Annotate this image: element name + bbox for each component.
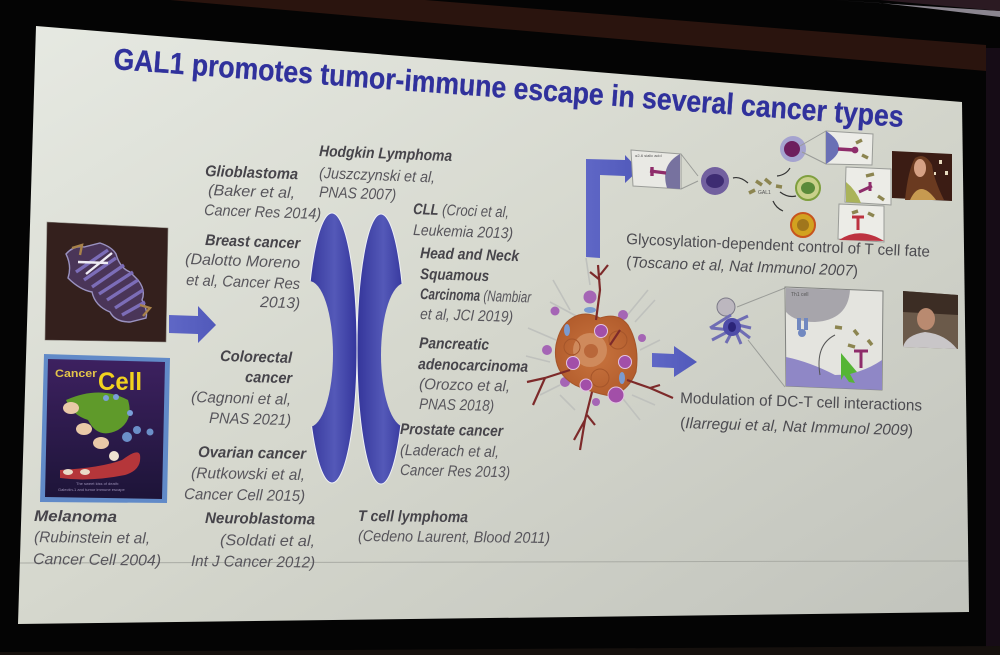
arrow: tumor to DC-T modulation xyxy=(652,346,697,377)
text: T cell lymphoma: (Cedeno Laurent, Blood 2011) xyxy=(358,528,550,547)
text: Breast cancer: et al, Cancer Res xyxy=(186,272,301,293)
icon: left crescent xyxy=(307,213,357,483)
icon: tumor with vessels xyxy=(526,258,673,450)
text: T cell lymphoma xyxy=(358,508,550,547)
text: Hodgkin Lymphoma: PNAS 2007) xyxy=(319,184,396,204)
text: Head and Neck Squamous Carcinoma: Head and Neck xyxy=(420,245,521,265)
title: GAL1 promotes tumor-immune escape in several cancer types xyxy=(112,43,905,134)
text: Ovarian cancer xyxy=(184,444,307,505)
text: Head and Neck Squamous Carcinoma xyxy=(420,245,532,326)
arrow: tumor to T cell fate xyxy=(586,155,639,258)
text: Hodgkin Lymphoma: (Juszczynski et al, xyxy=(319,165,435,186)
icon: Cancer Cell journal cover: The sweet kiss of death: xyxy=(76,481,119,486)
text: Ovarian cancer: Cancer Cell 2015) xyxy=(184,486,305,505)
icon: Cancer Cell journal cover: Cancer xyxy=(55,368,98,380)
text: T cell lymphoma: T cell lymphoma xyxy=(358,508,468,526)
text: Prostate cancer xyxy=(400,421,510,481)
caption: T cell fate xyxy=(626,231,930,280)
text: Glioblastoma xyxy=(204,163,321,223)
icon: right crescent xyxy=(357,214,405,484)
diagram: DC-T cell interaction xyxy=(710,287,883,390)
text: Pancreatic adenocarcinoma xyxy=(418,335,529,415)
text: Head and Neck Squamous Carcinoma: Squamous xyxy=(420,266,490,285)
inset: sialic acid: α2-6 sialic acid xyxy=(635,153,662,158)
icon: Cancer Cell journal cover: Cell xyxy=(98,368,142,396)
text: Head and Neck Squamous Carcinoma: Carcinoma (Nambiar xyxy=(420,286,532,307)
inset: middle xyxy=(845,167,891,205)
text: Glioblastoma: Glioblastoma xyxy=(205,163,299,183)
text: Hodgkin Lymphoma: Hodgkin Lymphoma xyxy=(319,143,453,165)
cell: Th17 green xyxy=(796,176,820,200)
arrow: GAL1 to cancers xyxy=(169,306,216,343)
text: Head and Neck Squamous Carcinoma: et al, JCI 2019) xyxy=(420,306,513,326)
inset: bottom xyxy=(838,204,884,242)
text: Glioblastoma: Cancer Res 2014) xyxy=(204,202,321,223)
caption: DC-T modulation: Modulation of DC-T cell interactions xyxy=(680,390,923,415)
inset: synapse: Th1 cell xyxy=(791,292,809,298)
photo: man xyxy=(903,291,958,349)
text: Colorectal cancer: cancer xyxy=(245,369,293,387)
text: Ovarian cancer: Ovarian cancer xyxy=(198,444,307,463)
text: Prostate cancer: Prostate cancer xyxy=(400,421,504,440)
caption: DC-T modulation: (Ilarregui et al, Nat Immunol 2009) xyxy=(680,415,913,439)
text: Prostate cancer: (Laderach et al, xyxy=(400,442,499,461)
inset: sialic acid xyxy=(631,150,681,189)
icon: GAL1 protein structure xyxy=(45,222,168,342)
icon: Cancer Cell journal cover: Galectin-1 and tumor immune escape xyxy=(58,487,125,492)
cell: dendritic cell xyxy=(710,298,751,344)
text: Breast cancer: (Dalotto Moreno xyxy=(185,251,301,272)
text: Melanoma: Melanoma xyxy=(34,508,118,526)
inset: top xyxy=(826,131,873,165)
icon: green cursor xyxy=(841,353,857,383)
text: CLL: Leukemia 2013) xyxy=(413,222,513,242)
photo: woman xyxy=(892,151,952,201)
caption: T cell fate: (Toscano et al, Nat Immunol 2007) xyxy=(626,254,858,280)
GAL1 dimers and arrows xyxy=(733,168,796,211)
text: Prostate cancer: Cancer Res 2013) xyxy=(400,462,510,481)
text: Ovarian cancer: (Rutkowski et al, xyxy=(191,465,305,484)
text: Neuroblastoma: (Soldati et al, xyxy=(220,532,315,550)
text: Melanoma: Cancer Cell 2004) xyxy=(33,551,161,570)
text: Breast cancer xyxy=(185,232,301,312)
text: Melanoma xyxy=(33,508,161,570)
diagram: T cell fate xyxy=(631,131,891,242)
text: Colorectal cancer: (Cagnoni et al, xyxy=(191,389,291,409)
caption: T cell fate: Glycosylation-dependent control of T cell fate xyxy=(626,231,930,261)
text: Colorectal cancer: Colorectal xyxy=(220,348,293,367)
caption: DC-T modulation xyxy=(680,390,923,439)
text: Pancreatic adenocarcinoma: Pancreatic xyxy=(419,335,490,354)
text: Neuroblastoma: Int J Cancer 2012) xyxy=(191,553,315,572)
text: Pancreatic adenocarcinoma: (Orozco et al, xyxy=(419,376,510,395)
text: Pancreatic adenocarcinoma: adenocarcinoma xyxy=(418,356,529,376)
cell: Th1 top xyxy=(780,136,806,162)
GAL1 dimers and arrows: GAL1 xyxy=(758,190,771,196)
text: Glioblastoma: (Baker et al, xyxy=(208,182,295,202)
icon: Cancer Cell journal cover xyxy=(40,354,170,503)
text: Hodgkin Lymphoma xyxy=(319,143,453,204)
text: CLL xyxy=(413,201,513,242)
text: Colorectal cancer xyxy=(191,348,293,429)
text: Breast cancer: Breast cancer xyxy=(205,232,301,252)
text: Breast cancer: 2013) xyxy=(259,294,300,312)
cell: Treg orange xyxy=(791,213,815,237)
cell: Th2 left xyxy=(701,167,729,195)
text: Neuroblastoma: Neuroblastoma xyxy=(205,510,316,528)
text: Neuroblastoma xyxy=(191,510,316,572)
text: CLL: CLL (Croci et al, xyxy=(413,201,509,221)
text: Pancreatic adenocarcinoma: PNAS 2018) xyxy=(419,396,494,415)
text: Melanoma: (Rubinstein et al, xyxy=(34,529,150,547)
inset: synapse xyxy=(785,287,883,390)
text: Colorectal cancer: PNAS 2021) xyxy=(209,410,291,429)
